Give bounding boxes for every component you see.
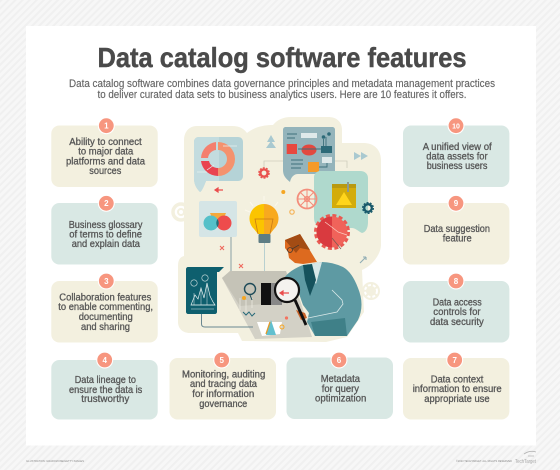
flowchart speech panel xyxy=(283,127,335,182)
feature card 9: feature xyxy=(443,234,472,244)
connector line xyxy=(231,237,244,288)
feature card 3: documenting xyxy=(79,312,133,323)
feature card 7 xyxy=(403,352,509,420)
feature card 2: Business glossary xyxy=(69,220,142,231)
small red x marks xyxy=(220,246,243,268)
feature card 1: to major data xyxy=(78,147,134,158)
dark teal chart panel xyxy=(186,267,224,314)
big red gear with chart xyxy=(316,216,348,249)
feature card 5: Monitoring, auditing xyxy=(182,370,265,380)
feature card 4: trustworthy xyxy=(81,394,129,405)
connector line gear to flowchart xyxy=(264,161,347,168)
decorative gear right xyxy=(362,282,380,300)
small blue-gray arrow xyxy=(360,257,366,263)
feature card 10: data assets for xyxy=(426,152,488,162)
feature card 4: 4 xyxy=(102,356,107,365)
feature card 8 xyxy=(403,272,509,342)
feature card 5: governance xyxy=(199,399,248,410)
orange dots xyxy=(281,190,294,214)
large magnifier xyxy=(275,278,306,325)
feature card 6: 6 xyxy=(337,356,342,365)
feature card 7: appropriate use xyxy=(424,394,490,405)
double right arrows xyxy=(354,152,368,160)
feature card 7: Data context xyxy=(431,374,484,386)
teal speech panel with note xyxy=(314,171,368,233)
TechTarget logo xyxy=(515,451,536,465)
decorative gear left xyxy=(173,204,189,220)
feature card 7: 7 xyxy=(452,356,457,365)
light bulb xyxy=(245,196,278,243)
feature card 6: optimization xyxy=(315,394,366,404)
feature card 5: for information xyxy=(192,389,254,400)
intro text xyxy=(69,78,495,101)
feature card 2: and explain data xyxy=(72,239,140,250)
feature card 1: Ability to connect xyxy=(69,137,142,148)
feature card 9: Data suggestion xyxy=(424,224,490,235)
salmon wheel gear xyxy=(298,190,316,208)
illustration credit: ILLUSTRATION: GRAFFIZONE/GETTY IMAGES xyxy=(26,459,84,463)
beige backdrop blob xyxy=(178,117,381,342)
bulb connector xyxy=(264,243,266,280)
feature card 1: 1 xyxy=(104,122,109,130)
up arrows xyxy=(266,135,276,148)
gray table xyxy=(222,271,312,339)
feature card 2 xyxy=(51,195,158,264)
intro text: Data catalog software combines data governance principles and metadata management practices xyxy=(69,78,495,90)
title: Data catalog software features xyxy=(98,42,466,73)
feature card 7: information to ensure xyxy=(413,384,502,395)
feature card 5: and tracing data xyxy=(190,379,257,390)
central illustration xyxy=(173,117,381,342)
feature card 3: to enable commenting, xyxy=(58,302,153,313)
feature card 2: of terms to define xyxy=(69,229,142,240)
feature card 2: 2 xyxy=(104,199,109,208)
copyright: ©2023 TECHTARGET. ALL RIGHTS RESERVED xyxy=(456,459,512,463)
feature card 9 xyxy=(403,195,509,264)
feature card 6: for query xyxy=(322,384,359,395)
feature card 10: business users xyxy=(427,161,487,172)
small magnifier xyxy=(242,284,256,300)
connector from chart panel xyxy=(202,314,253,327)
feature card 10 xyxy=(403,117,509,187)
feature card 8: Data access xyxy=(433,298,482,308)
small red gear xyxy=(259,168,269,178)
feature card 5 xyxy=(170,352,276,420)
feature card 1: platforms and data xyxy=(66,156,145,168)
feature card 3: and sharing xyxy=(81,322,130,333)
feature card 3: Collaboration features xyxy=(59,292,151,303)
red arrow xyxy=(215,188,223,192)
feature card 4: ensure the data is xyxy=(69,385,142,396)
feature card 9: 9 xyxy=(454,199,459,208)
dark teal gear xyxy=(363,203,373,213)
feature card 8: data security xyxy=(430,317,484,328)
feature card 4 xyxy=(51,352,158,420)
feature card 1: sources xyxy=(89,166,121,177)
intro text: to deliver curated data sets to business analytics users. Here are 10 features it offers. xyxy=(98,89,466,101)
feature card 10: A unified view of xyxy=(423,142,492,153)
feature card 3: 3 xyxy=(104,277,109,286)
person in teal jacket xyxy=(284,234,362,336)
feature card 3 xyxy=(51,272,158,342)
feature card 4: Data lineage to xyxy=(75,375,136,386)
feature card 10: 10 xyxy=(452,124,460,130)
feature card 8: 8 xyxy=(454,277,459,286)
speech panel with donut chart xyxy=(194,137,243,192)
feature card 6 xyxy=(286,352,393,419)
feature card 1 xyxy=(51,117,158,187)
venn diagram panel xyxy=(199,201,237,237)
TechTarget logo: TechTarget xyxy=(515,459,536,465)
feature card 8: controls for xyxy=(433,307,481,318)
feature card 5: 5 xyxy=(219,356,224,365)
feature card 6: Metadata xyxy=(321,374,360,385)
